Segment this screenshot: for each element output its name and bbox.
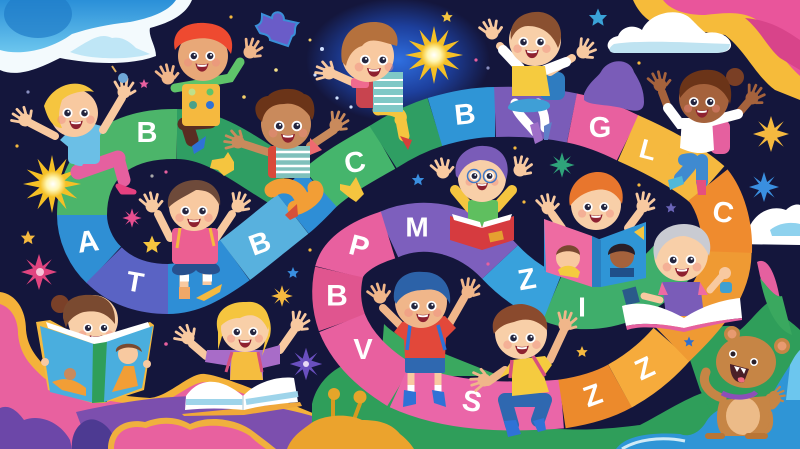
track letters: L (636, 133, 660, 167)
cloud: top left blue (0, 0, 192, 73)
segment: blue A (82, 215, 104, 265)
blue glow behind star (306, 0, 490, 122)
kid: navy shorts in pink shirt (139, 180, 253, 301)
cloud: right edge (734, 205, 800, 245)
track letters: B (453, 98, 477, 132)
picture book: kids covers (544, 219, 646, 287)
track letters: S (460, 385, 484, 419)
puzzle piece: yellow one (210, 152, 234, 176)
cloud: top right white (608, 12, 731, 53)
kid: grey hair with open book (622, 224, 742, 332)
segment: pink V (342, 323, 400, 385)
segment: blue (168, 260, 235, 289)
kid: purple hair with glasses and red book (430, 146, 535, 250)
track letters: P (346, 229, 372, 265)
plant: green leaves (760, 278, 792, 335)
animal: brown bear creature (704, 326, 790, 436)
track letters: Z (579, 378, 607, 414)
segment: orange curve (672, 250, 727, 344)
track letters: C (710, 195, 736, 231)
kid: red hair with yellow backpack (155, 23, 265, 154)
track letters: I (578, 292, 586, 322)
segment: blue B (435, 112, 495, 122)
segment: green end (552, 262, 672, 305)
kid: white sleeves with blue backpack (478, 12, 599, 144)
kid: blonde with open book (172, 302, 312, 380)
puzzle piece: yellow two (340, 177, 364, 202)
blue cloud: bottom right (616, 350, 800, 449)
track letters: V (353, 334, 373, 366)
segment: pink B (337, 272, 342, 323)
segment: blue (293, 188, 320, 214)
terrain: bottom left pink hills (0, 292, 330, 449)
track letters: A (75, 224, 101, 260)
kid: orange hair with picture book (536, 172, 657, 230)
segment: purple M (388, 227, 500, 262)
yellow blob creature with antennae (287, 388, 414, 449)
kid: blue hair with red shirt (366, 272, 482, 407)
segment: pink P (339, 235, 388, 272)
kid: brown hair with yellow shirt (469, 304, 579, 437)
sunburst: top centre (405, 26, 463, 84)
track letters: Z (630, 351, 660, 387)
track letters: C (341, 145, 369, 181)
track: upper path (82, 112, 727, 289)
segment: green B (82, 134, 177, 215)
segment: orange C (708, 185, 727, 252)
segment: green C (320, 147, 383, 188)
kid: brown hair with pink backpack (314, 22, 412, 150)
segment: indigo T (104, 265, 168, 289)
kid: dark skin with hair bun (647, 68, 768, 195)
open book: bottom centre (182, 378, 302, 416)
segment: pink G (572, 118, 628, 138)
terrain: green hills (312, 300, 800, 449)
kid: blonde with pink trousers (9, 66, 135, 192)
kid: curly hair with striped shirt (223, 89, 351, 220)
segment: yellow L (628, 138, 708, 185)
track: lower loop (337, 227, 727, 406)
segment: yellow Z (620, 344, 672, 386)
swirl: top right pink and yellow (633, 0, 800, 100)
kid: reader with blue book (36, 295, 154, 403)
track letters (75, 98, 736, 419)
segment: light blue B (235, 214, 293, 260)
track letters: M (405, 212, 429, 242)
track letters: B (326, 280, 348, 312)
segment: blue Z (500, 262, 552, 298)
segment: purple (495, 112, 572, 118)
segment: pink S (400, 385, 562, 406)
segment: dark orange Z (562, 386, 620, 404)
puzzle piece: top (256, 12, 298, 46)
segment: dark green (177, 134, 282, 182)
purple rock (584, 61, 644, 111)
plant: pink and green feather (757, 261, 780, 300)
track letters: T (124, 265, 146, 299)
track letters: Z (515, 263, 539, 297)
sunburst: left (23, 155, 81, 213)
track letters: B (137, 117, 157, 149)
segment: dark green (383, 122, 435, 147)
track letters: B (245, 225, 275, 263)
track letters: G (589, 112, 611, 144)
